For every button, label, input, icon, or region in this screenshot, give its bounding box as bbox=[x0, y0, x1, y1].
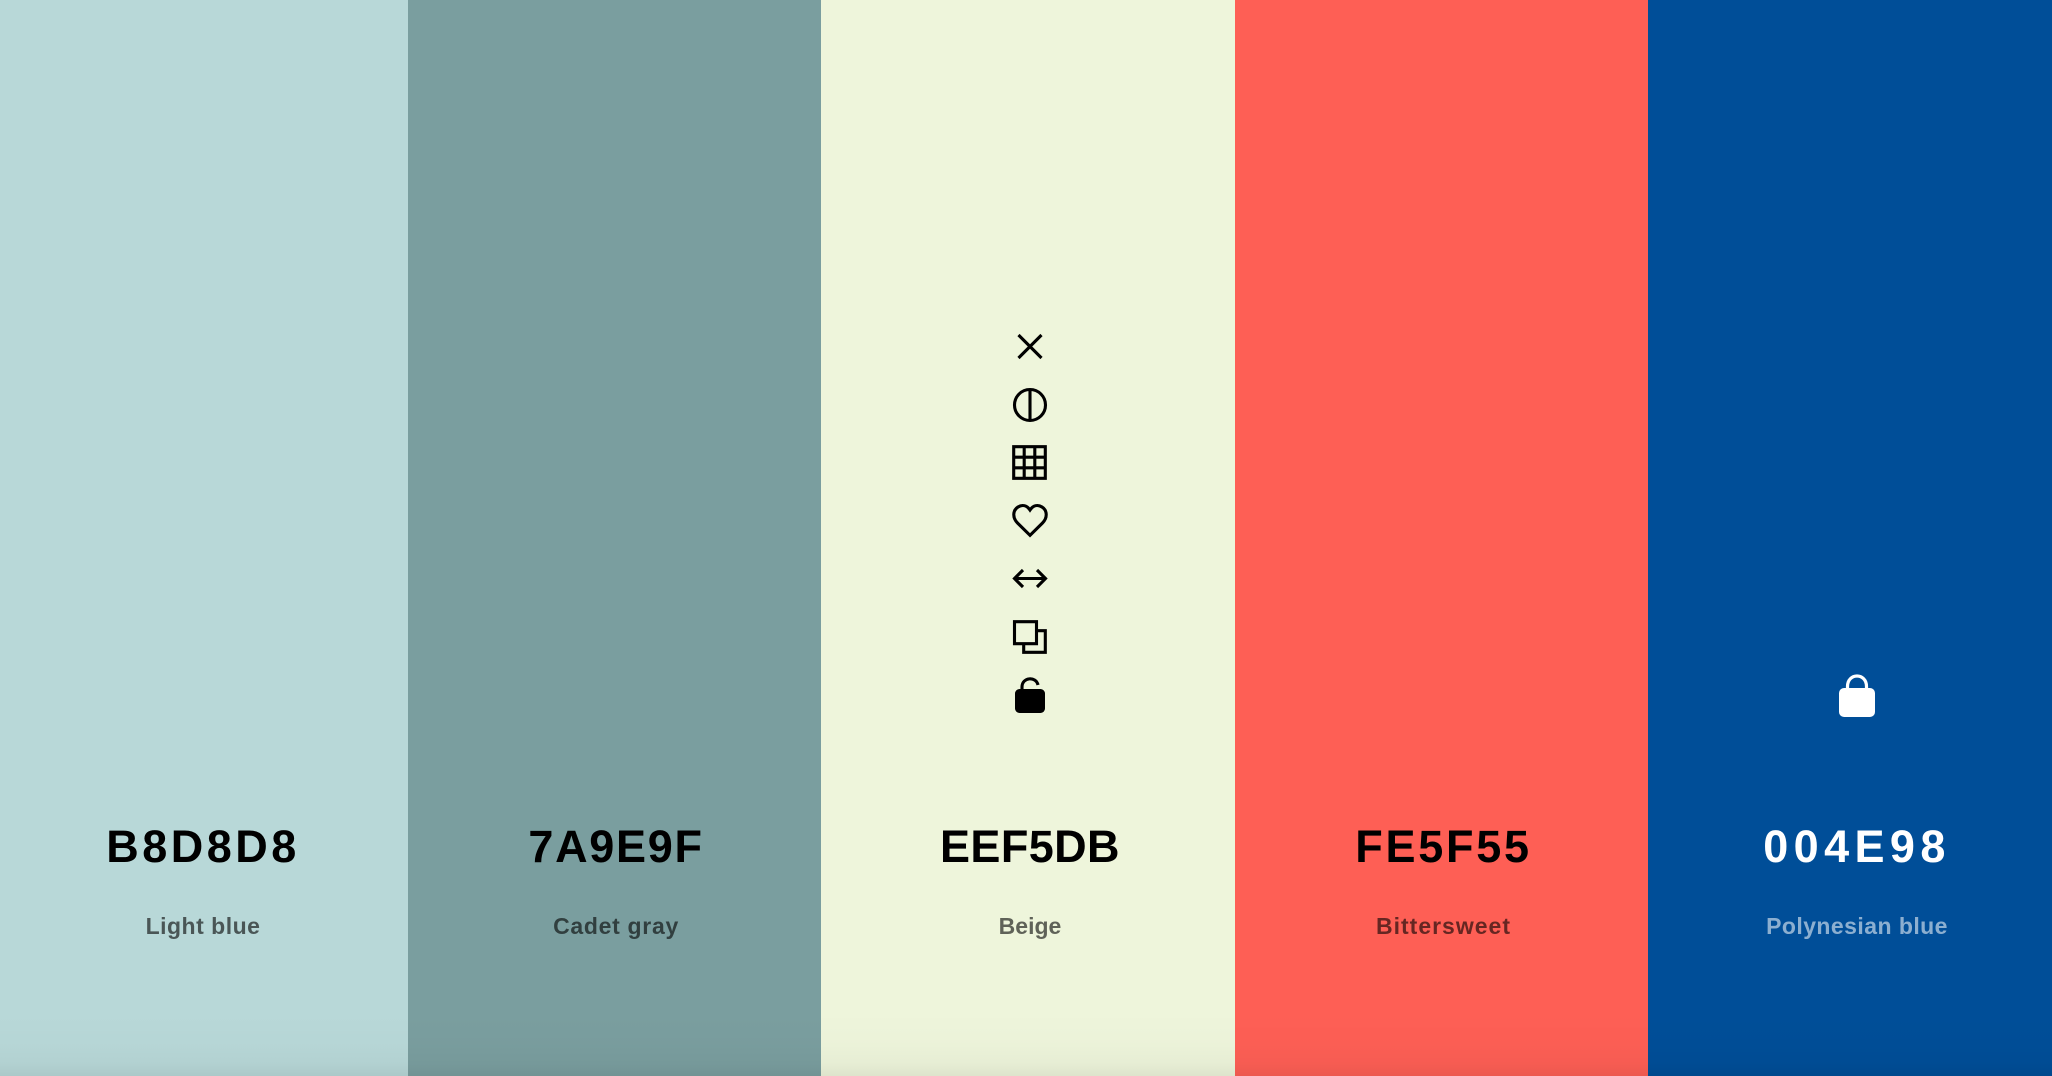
panel: Cadet gray swatch bbox=[408, 0, 821, 1076]
panel: Light blue swatch bbox=[0, 0, 408, 1076]
icon: close bbox=[1018, 335, 1042, 358]
panel: Polynesian blue swatch bbox=[1648, 0, 2052, 1076]
bottom edge shading bbox=[0, 1012, 2052, 1076]
icon: open lock bbox=[1015, 679, 1045, 713]
colour name: Polynesian blue: Polynesian blue bbox=[1766, 913, 1948, 939]
hex code: 7A9E9F: 7A9E9F bbox=[528, 821, 704, 872]
hex code: B8D8D8: B8D8D8 bbox=[106, 821, 300, 872]
icon toolbar on beige swatch bbox=[1012, 334, 1048, 713]
colour name: Bittersweet: Bittersweet bbox=[1376, 913, 1511, 939]
icon: closed lock on blue swatch bbox=[1839, 674, 1875, 717]
hex code: 004E98: 004E98 bbox=[1763, 821, 1951, 872]
panel: Bittersweet swatch bbox=[1235, 0, 1648, 1076]
icon: grid bbox=[1014, 447, 1045, 478]
icon: contrast circle bbox=[1014, 389, 1046, 421]
panel: Beige swatch bbox=[821, 0, 1235, 1076]
icon: copy squares bbox=[1014, 622, 1045, 652]
hex code: FE5F55: FE5F55 bbox=[1355, 821, 1532, 872]
colour name: Beige: Beige bbox=[999, 913, 1061, 939]
hex code: EEF5DB: EEF5DB bbox=[940, 821, 1120, 872]
colour name: Light blue: Light blue bbox=[146, 913, 260, 939]
icon: heart bbox=[1014, 506, 1046, 535]
colour name: Cadet gray: Cadet gray bbox=[553, 913, 679, 939]
icon: horizontal resize arrows bbox=[1014, 570, 1046, 587]
